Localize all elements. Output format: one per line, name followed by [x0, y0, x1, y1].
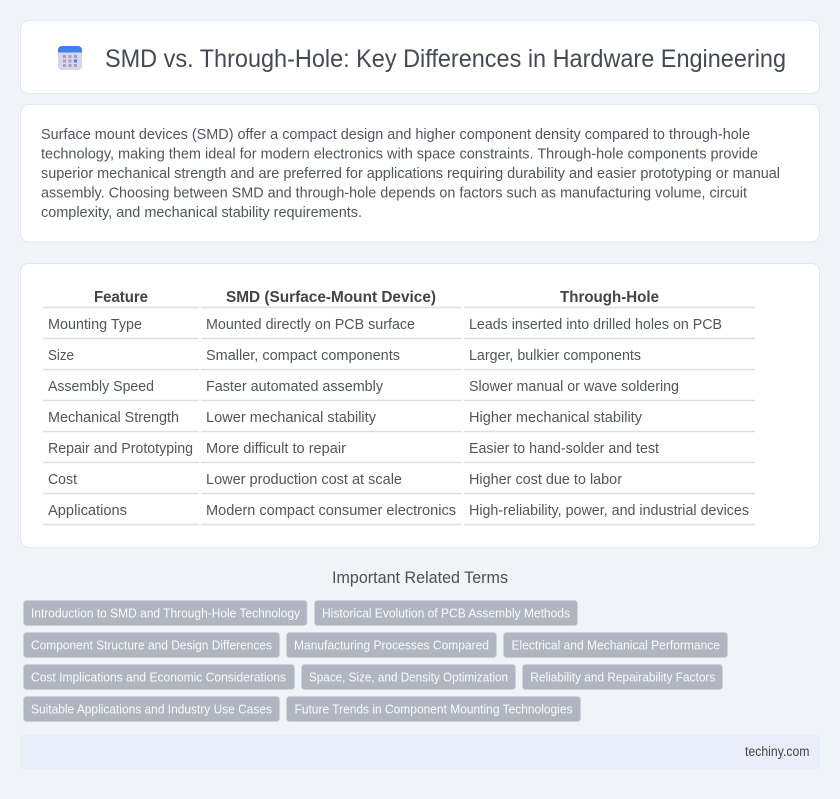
table row: size: Larger, bulkier components [469, 347, 641, 364]
tag [286, 632, 496, 658]
table row: mounting type [48, 316, 722, 333]
table row: repair and prototyping: Easier to hand-solder and test [469, 440, 660, 457]
footer [20, 735, 820, 769]
tag: Reliability and Repairability Factors [530, 670, 715, 684]
table row: applications: Applications [48, 502, 127, 519]
table row: applications: Modern compact consumer electronics [206, 502, 456, 519]
table row: mounting type: Mounting Type [48, 316, 142, 333]
tag [522, 664, 722, 690]
tag: Suitable Applications and Industry Use Cases [31, 702, 272, 716]
tag: Manufacturing Processes Compared [294, 638, 489, 652]
tag: Space, Size, and Density Optimization [309, 670, 508, 684]
table row: assembly speed: Faster automated assembly [206, 378, 383, 395]
table header row: Through-Hole [560, 289, 659, 306]
footer: techiny.com [745, 744, 810, 759]
panel: title header [20, 20, 820, 94]
text block: introduction paragraph: superior mechanical strength and are preferred for applications requiring durability and easier prototyping or manual [41, 165, 780, 182]
table row: cost: Cost [48, 471, 78, 488]
table row: assembly speed [48, 378, 679, 395]
text block: introduction paragraph: technology, making them ideal for modern electronics with space constraints. Through-hole components provide [41, 146, 758, 162]
table header row [94, 289, 659, 306]
table header row: SMD (Surface-Mount Device) [226, 289, 436, 306]
table row: mounting type: Leads inserted into drilled holes on PCB [469, 316, 722, 333]
panel: comparison table [20, 264, 820, 548]
text block: introduction paragraph: complexity, and mechanical stability requirements. [41, 204, 362, 221]
tag [24, 696, 280, 722]
table row: cost [48, 471, 622, 488]
table row: mechanical strength: Higher mechanical stability [469, 409, 642, 426]
table row: repair and prototyping [48, 440, 660, 457]
tag group: related terms [24, 600, 728, 722]
heading: important related terms: Important Related Terms [332, 569, 508, 587]
tag [504, 632, 728, 658]
tag: Cost Implications and Economic Considerations [31, 670, 286, 684]
text block: introduction paragraph [41, 126, 780, 221]
table row: mechanical strength: Lower mechanical stability [206, 409, 376, 426]
table row: mechanical strength [48, 409, 642, 426]
text block: introduction paragraph: Surface mount devices (SMD) offer a compact design and higher component density compared to through-hole [41, 126, 750, 143]
table row: cost: Higher cost due to labor [469, 471, 622, 488]
table row: applications [48, 502, 749, 519]
table row: assembly speed: Assembly Speed [48, 378, 154, 395]
text block: introduction paragraph: assembly. Choosing between SMD and through-hole depends on factors such as manufacturing volume, circuit [41, 184, 748, 202]
table row: repair and prototyping: More difficult to repair [206, 440, 346, 457]
tag: Future Trends in Component Mounting Technologies [294, 702, 572, 716]
table row: mechanical strength: Mechanical Strength [48, 409, 179, 426]
table header row: Feature [94, 289, 148, 306]
tag [24, 632, 280, 658]
icon: calendar grid [58, 46, 82, 70]
tag: Introduction to SMD and Through-Hole Technology [31, 606, 301, 620]
tag [24, 600, 307, 626]
table row: applications: High-reliability, power, and industrial devices [469, 502, 749, 519]
tag: Component Structure and Design Differences [31, 638, 272, 652]
table row: cost: Lower production cost at scale [206, 471, 402, 488]
panel: introduction [20, 104, 820, 242]
table row: repair and prototyping: Repair and Prototyping [48, 440, 193, 457]
table row: mounting type: Mounted directly on PCB surface [206, 316, 415, 333]
tag [302, 664, 516, 690]
table row: size: Smaller, compact components [206, 347, 400, 364]
tag [286, 696, 580, 722]
tag: Historical Evolution of PCB Assembly Methods [322, 606, 570, 620]
title: SMD vs. Through-Hole: Key Differences in Hardware Engineering [105, 45, 786, 73]
tag [24, 664, 294, 690]
tag [314, 600, 578, 626]
table row: size: Size [48, 347, 74, 364]
tag: Electrical and Mechanical Performance [512, 638, 720, 652]
table row: size [48, 347, 641, 364]
table row: assembly speed: Slower manual or wave soldering [469, 378, 679, 395]
